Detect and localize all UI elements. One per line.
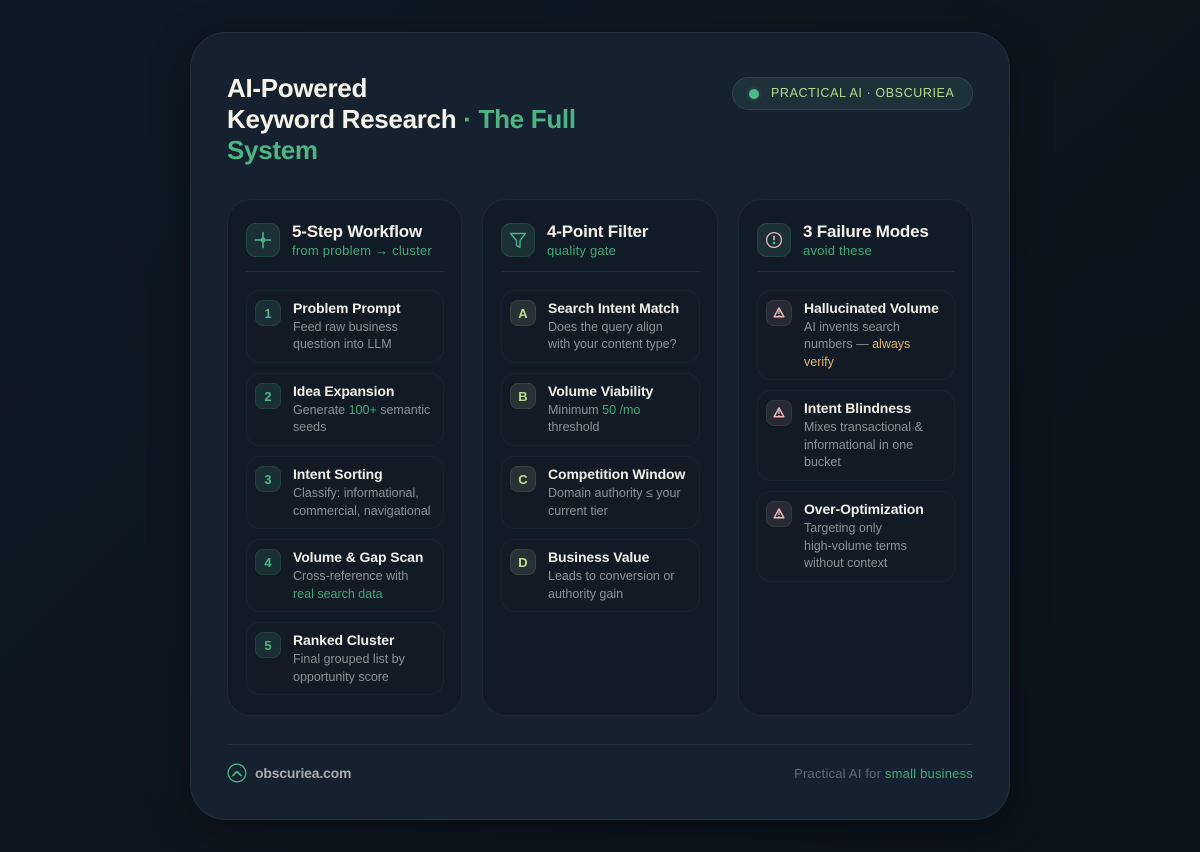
filter c: Domain authority ≤ your bbox=[548, 486, 681, 500]
step 4: Cross-reference with bbox=[293, 569, 408, 583]
step 3: Intent Sorting bbox=[293, 466, 383, 482]
footer tagline: Practical AI for small business bbox=[794, 766, 973, 781]
step 3 bbox=[246, 456, 444, 529]
subheading: from problem → cluster bbox=[292, 243, 432, 258]
failure 3: high-volume terms bbox=[804, 539, 907, 553]
filter c: current tier bbox=[548, 504, 608, 518]
failure 1 bbox=[757, 290, 955, 380]
filter b: B bbox=[518, 389, 528, 404]
icon: sparkle cross bbox=[246, 223, 280, 257]
filter b: Volume Viability bbox=[548, 383, 653, 399]
step 3: Classify: informational, bbox=[293, 486, 419, 500]
step 2: Generate 100+ semantic bbox=[293, 403, 430, 417]
filter c bbox=[501, 456, 700, 529]
step 5: Final grouped list by bbox=[293, 652, 405, 666]
filter a: Search Intent Match bbox=[548, 300, 679, 316]
filter b bbox=[501, 373, 700, 446]
filter d: Leads to conversion or bbox=[548, 569, 674, 583]
card bbox=[190, 32, 1010, 820]
failure 1: numbers — always bbox=[804, 337, 910, 351]
step 5 bbox=[246, 622, 444, 695]
step 1: 1 bbox=[264, 306, 272, 321]
step 5: 5 bbox=[264, 638, 272, 653]
filter c: Competition Window bbox=[548, 466, 685, 482]
filter d: D bbox=[518, 555, 528, 570]
step 4 bbox=[246, 539, 444, 612]
failure 3: Targeting only bbox=[804, 521, 882, 535]
filter d: authority gain bbox=[548, 587, 623, 601]
step 3: commercial, navigational bbox=[293, 504, 431, 518]
filter a: A bbox=[518, 306, 528, 321]
icon: alert circle bbox=[757, 223, 791, 257]
step 5: Ranked Cluster bbox=[293, 632, 394, 648]
failure 2: Intent Blindness bbox=[804, 400, 911, 416]
failure 2: bucket bbox=[804, 455, 841, 469]
filter d bbox=[501, 539, 700, 612]
heading: 3 Failure Modes bbox=[803, 222, 929, 241]
filter a: Does the query align bbox=[548, 320, 663, 334]
badge: practical ai: PRACTICAL AI · OBSCURIEA bbox=[771, 86, 954, 100]
failure 2: Mixes transactional & bbox=[804, 420, 923, 434]
step 5: opportunity score bbox=[293, 670, 389, 684]
icon: funnel bbox=[501, 223, 535, 257]
step 1: Feed raw business bbox=[293, 320, 398, 334]
title: AI-Powered bbox=[227, 73, 367, 103]
step 1: question into LLM bbox=[293, 337, 392, 351]
filter a bbox=[501, 290, 700, 363]
filter b: Minimum 50 /mo bbox=[548, 403, 640, 417]
failure 1: Hallucinated Volume bbox=[804, 300, 939, 316]
step 1 bbox=[246, 290, 444, 363]
step 1: Problem Prompt bbox=[293, 300, 401, 316]
step 4: 4 bbox=[264, 555, 272, 570]
step 3: 3 bbox=[264, 472, 272, 487]
failure 3: without context bbox=[804, 556, 887, 570]
filter d: Business Value bbox=[548, 549, 649, 565]
footer brand: obscuriea.com bbox=[255, 765, 351, 781]
badge: practical ai bbox=[732, 77, 973, 110]
filter a: with your content type? bbox=[548, 337, 677, 351]
failure 3 bbox=[757, 491, 955, 582]
heading: 4-Point Filter bbox=[547, 222, 648, 241]
step 4: Volume & Gap Scan bbox=[293, 549, 423, 565]
panel: 3 failure modes bbox=[738, 199, 973, 716]
title: Keyword Research · The Full System bbox=[227, 104, 576, 165]
step 2 bbox=[246, 373, 444, 446]
filter c: C bbox=[518, 472, 528, 487]
heading: 5-Step Workflow bbox=[292, 222, 422, 241]
failure 1: verify bbox=[804, 355, 834, 369]
filter b: threshold bbox=[548, 420, 599, 434]
footer brand bbox=[228, 764, 351, 782]
title bbox=[227, 73, 576, 165]
step 2: 2 bbox=[264, 389, 272, 404]
step 2: seeds bbox=[293, 420, 326, 434]
step 4: real search data bbox=[293, 587, 383, 601]
step 2: Idea Expansion bbox=[293, 383, 394, 399]
subheading: avoid these bbox=[803, 243, 872, 258]
failure 2 bbox=[757, 390, 955, 481]
subheading: quality gate bbox=[547, 243, 616, 258]
panel: 4-point filter bbox=[482, 199, 718, 716]
failure 1: AI invents search bbox=[804, 320, 900, 334]
failure 2: informational in one bbox=[804, 438, 913, 452]
panel: 5-step workflow bbox=[227, 199, 462, 716]
failure 3: Over-Optimization bbox=[804, 501, 924, 517]
